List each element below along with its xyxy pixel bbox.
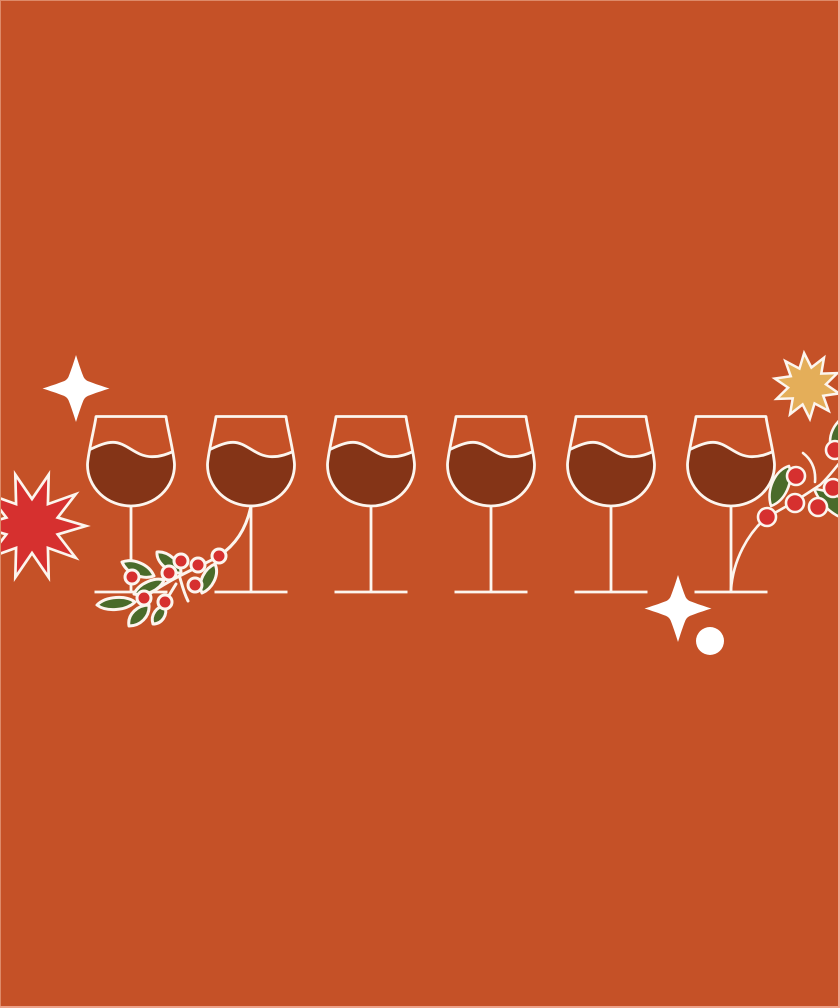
holly sprig: right	[731, 418, 840, 590]
starburst: red	[0, 475, 86, 577]
wine glass 5	[561, 416, 661, 592]
sparkle: upper left	[42, 355, 110, 422]
wine glass 6	[681, 416, 781, 592]
starburst: gold	[773, 350, 840, 422]
white dot	[696, 627, 724, 655]
sparkle: lower right	[644, 575, 712, 642]
wine glass 4	[441, 416, 541, 592]
wine glass 3	[321, 416, 421, 592]
holly sprig: left	[97, 506, 251, 626]
wine glass 1	[81, 416, 181, 592]
wine glass 2	[201, 416, 301, 592]
